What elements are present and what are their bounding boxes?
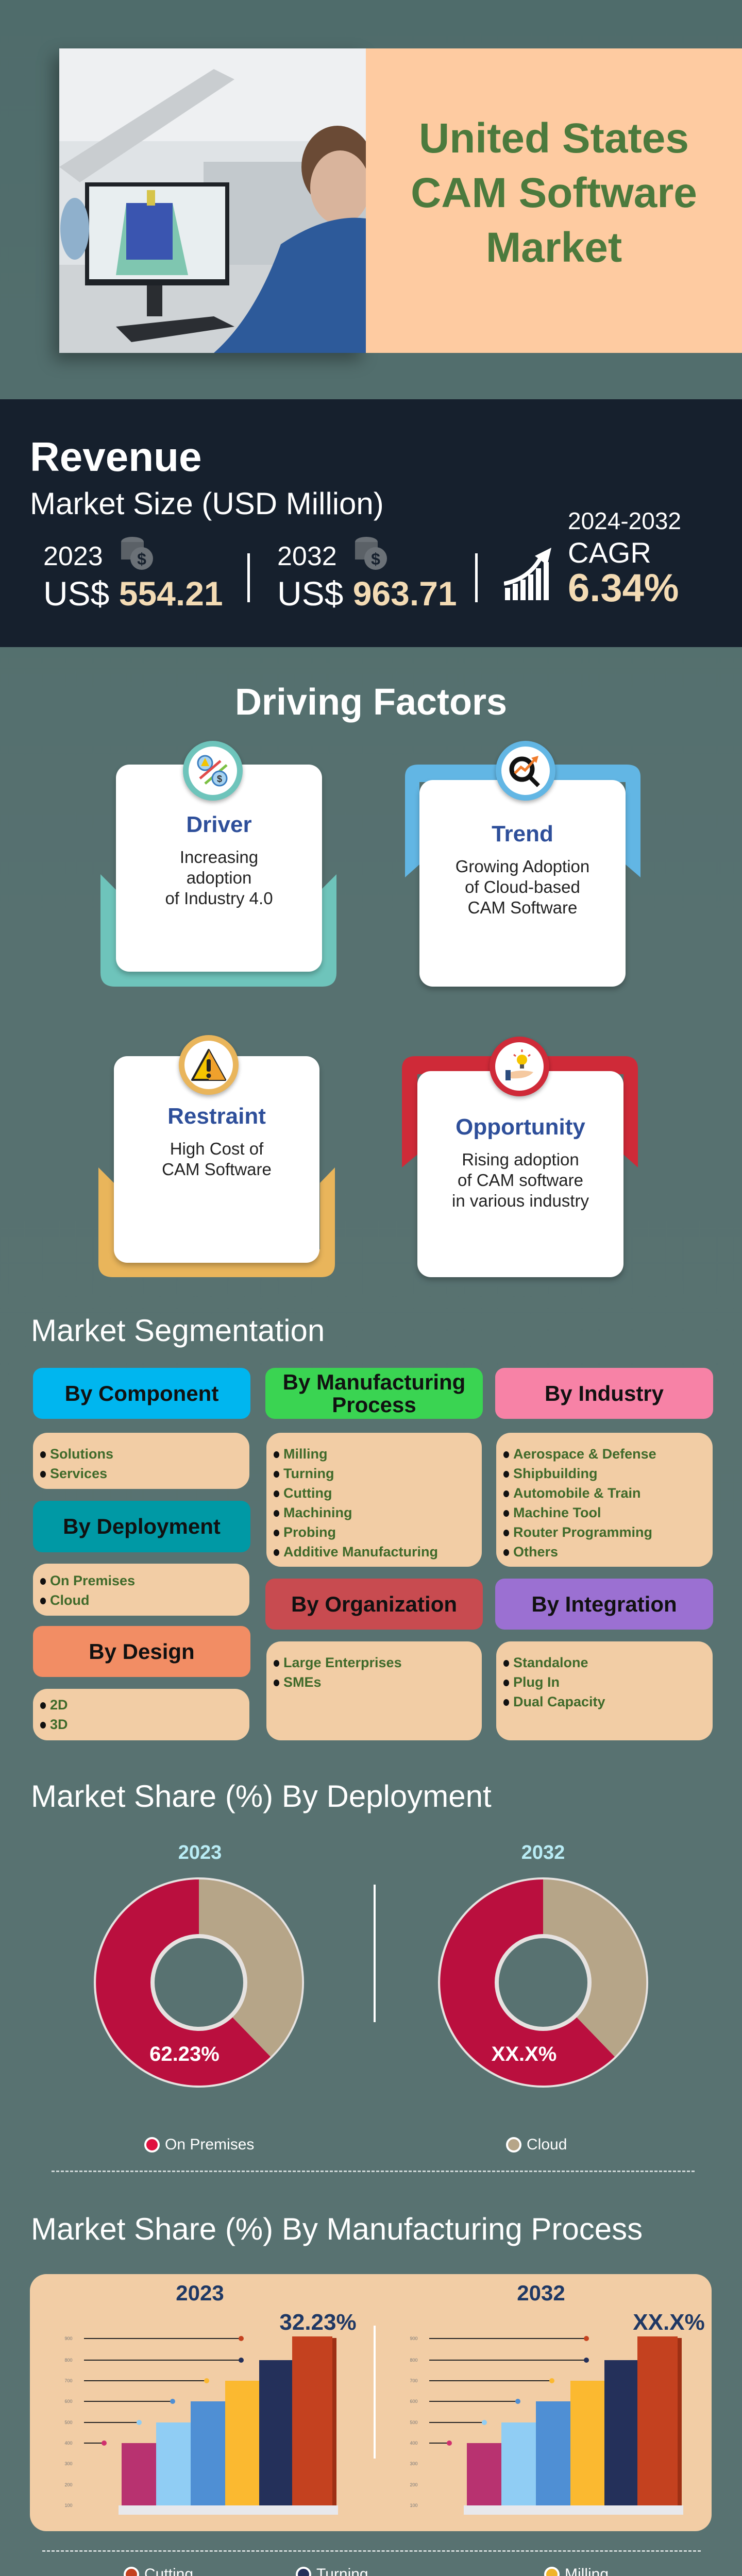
segment: by component: [33, 1368, 250, 1419]
list: integration items: [496, 1641, 713, 1740]
icon: growth chart: [504, 548, 551, 600]
panel: driver: adoption: [187, 868, 251, 887]
panel: trend: Trend: [492, 821, 553, 846]
list: integration items: Dual Capacity: [513, 1694, 605, 1709]
panel: opportunity: Rising adoption: [462, 1150, 579, 1169]
stat 2032: [277, 537, 457, 613]
donut charts: deployment: 2032: [521, 1842, 565, 1863]
donut charts: deployment: 2023: [178, 1842, 222, 1863]
bar charts panel: 800: [64, 2358, 73, 2363]
list: component items: [33, 1433, 249, 1489]
list: industry items: Router Programming: [513, 1524, 652, 1540]
panel: driver: Driver: [186, 812, 252, 837]
list: industry items: Aerospace & Defense: [513, 1446, 656, 1462]
legend: deployment: [144, 2136, 567, 2153]
panel: driver: of Industry 4.0: [165, 889, 273, 908]
icon: coins: [355, 537, 387, 570]
list: deployment items: [33, 1564, 249, 1616]
bar charts panel: 300: [64, 2461, 73, 2466]
list: design items: [33, 1689, 249, 1740]
segment: by design: By Design: [89, 1639, 195, 1663]
segment: by industry: [495, 1368, 713, 1419]
panel: opportunity: [402, 1037, 638, 1282]
panel: driver: Increasing: [180, 848, 258, 867]
CAGR stat: CAGR: [568, 536, 651, 569]
list: deployment items: Cloud: [50, 1592, 89, 1608]
segment: by industry: By Industry: [545, 1381, 664, 1405]
heading: market share by deployment: Market Share (%) By Deployment: [31, 1779, 492, 1814]
CAGR stat: 2024-2032: [568, 507, 681, 534]
segment: by integration: [495, 1579, 713, 1630]
stat 2023: 2023: [43, 541, 103, 571]
panel: restraint: Restraint: [167, 1104, 266, 1129]
segment: by organization: By Organization: [291, 1592, 457, 1616]
icon: driver: $: [217, 774, 222, 784]
list: manufacturing items: Turning: [283, 1466, 334, 1481]
CAGR stat: 6.34%: [568, 566, 679, 610]
list: organization items: SMEs: [283, 1674, 322, 1690]
panel: opportunity: of CAM software: [458, 1171, 583, 1190]
list: integration items: Plug In: [513, 1674, 560, 1690]
list: design items: 2D: [50, 1697, 68, 1713]
list: manufacturing items: Milling: [283, 1446, 327, 1462]
segment: by manufacturing process: By Manufacturing: [283, 1369, 465, 1394]
segment: by manufacturing process: [265, 1368, 483, 1419]
list: industry items: Shipbuilding: [513, 1466, 597, 1481]
list: organization items: Large Enterprises: [283, 1655, 402, 1670]
list: industry items: Automobile & Train: [513, 1485, 641, 1501]
bar charts panel: 200: [64, 2482, 73, 2487]
panel: trend: Growing Adoption: [456, 857, 589, 876]
stat 2023: [43, 537, 223, 613]
donut charts: deployment: [94, 1842, 648, 2088]
market size subtitle: Market Size (USD Million): [30, 486, 384, 521]
heading: driving factors: Driving Factors: [235, 682, 507, 723]
panel: restraint: [98, 1035, 335, 1277]
list: manufacturing items: Cutting: [283, 1485, 332, 1501]
segment: by design: [33, 1626, 250, 1677]
panel: trend: of Cloud-based: [465, 877, 580, 896]
list: manufacturing items: [266, 1433, 482, 1567]
divider: [475, 553, 478, 602]
title panel: CAM Software: [411, 169, 697, 216]
bar charts panel: XX.X%: [633, 2310, 705, 2335]
icon: opportunity: [490, 1037, 549, 1096]
bar charts panel: 100: [64, 2503, 73, 2508]
icon: warning: [179, 1035, 239, 1095]
heading: market segmentation: Market Segmentation: [31, 1313, 325, 1348]
list: component items: Services: [50, 1466, 107, 1481]
list: industry items: Machine Tool: [513, 1505, 601, 1520]
bar charts panel: 2023: [176, 2281, 224, 2305]
bar charts panel: 600: [64, 2399, 73, 2404]
bar charts panel: 500: [64, 2420, 73, 2425]
panel: restraint: High Cost of: [170, 1139, 263, 1158]
segment: by integration: By Integration: [531, 1592, 677, 1616]
divider: [247, 553, 250, 602]
panel: trend: CAM Software: [468, 898, 577, 917]
bar charts panel: 900: [64, 2336, 73, 2341]
list: industry items: Others: [513, 1544, 558, 1560]
dashed separator: [42, 2550, 701, 2552]
icon: driver: [183, 741, 243, 801]
list: manufacturing items: Machining: [283, 1505, 352, 1520]
segment: by manufacturing process: Process: [332, 1392, 416, 1417]
list: organization items: [266, 1641, 482, 1740]
segment: by deployment: By Deployment: [63, 1514, 221, 1538]
header photo: [59, 48, 366, 353]
bar charts panel: 400: [64, 2441, 73, 2446]
title panel: [366, 48, 742, 353]
list: integration items: Standalone: [513, 1655, 588, 1670]
bar charts panel: 700: [64, 2378, 73, 2383]
list: component items: Solutions: [50, 1446, 113, 1462]
revenue band: [0, 399, 742, 647]
segment: by deployment: [33, 1501, 250, 1552]
legend: deployment: On Premises: [165, 2136, 254, 2153]
heading: market share by manufacturing process: Market Share (%) By Manufacturing Process: [31, 2212, 643, 2246]
icon: trend: [496, 741, 555, 801]
revenue heading: Revenue: [30, 434, 201, 480]
panel: opportunity: Opportunity: [456, 1114, 585, 1140]
list: design items: 3D: [50, 1717, 68, 1732]
segment: by organization: [265, 1579, 483, 1630]
icon: coins: $: [371, 550, 380, 568]
donut charts: deployment: 62.23%: [149, 2043, 220, 2065]
panel: restraint: CAM Software: [162, 1160, 272, 1179]
panel: opportunity: in various industry: [452, 1191, 589, 1210]
legend: deployment: Cloud: [527, 2136, 567, 2153]
legend: manufacturing process: [124, 2566, 609, 2576]
bar charts panel: [30, 2274, 712, 2531]
list: deployment items: On Premises: [50, 1573, 135, 1588]
bar charts panel: 2032: [517, 2281, 565, 2305]
panel: driver: [100, 741, 336, 987]
stat 2032: 2032: [277, 541, 337, 571]
segment: by component: By Component: [65, 1381, 218, 1405]
list: manufacturing items: Additive Manufacturing: [283, 1544, 438, 1560]
donut charts: deployment: XX.X%: [492, 2043, 556, 2065]
icon: coins: [121, 537, 153, 570]
icon: coins: $: [137, 550, 146, 568]
title panel: Market: [486, 224, 622, 271]
title panel: United States: [419, 114, 689, 162]
panel: trend: [405, 741, 640, 991]
bar charts panel: 32.23%: [279, 2310, 357, 2335]
stat 2023: US$ 554.21: [43, 574, 223, 613]
list: manufacturing items: Probing: [283, 1524, 336, 1540]
CAGR stat: [568, 507, 681, 610]
list: industry items: [496, 1433, 713, 1567]
stat 2032: US$ 963.71: [277, 574, 457, 613]
